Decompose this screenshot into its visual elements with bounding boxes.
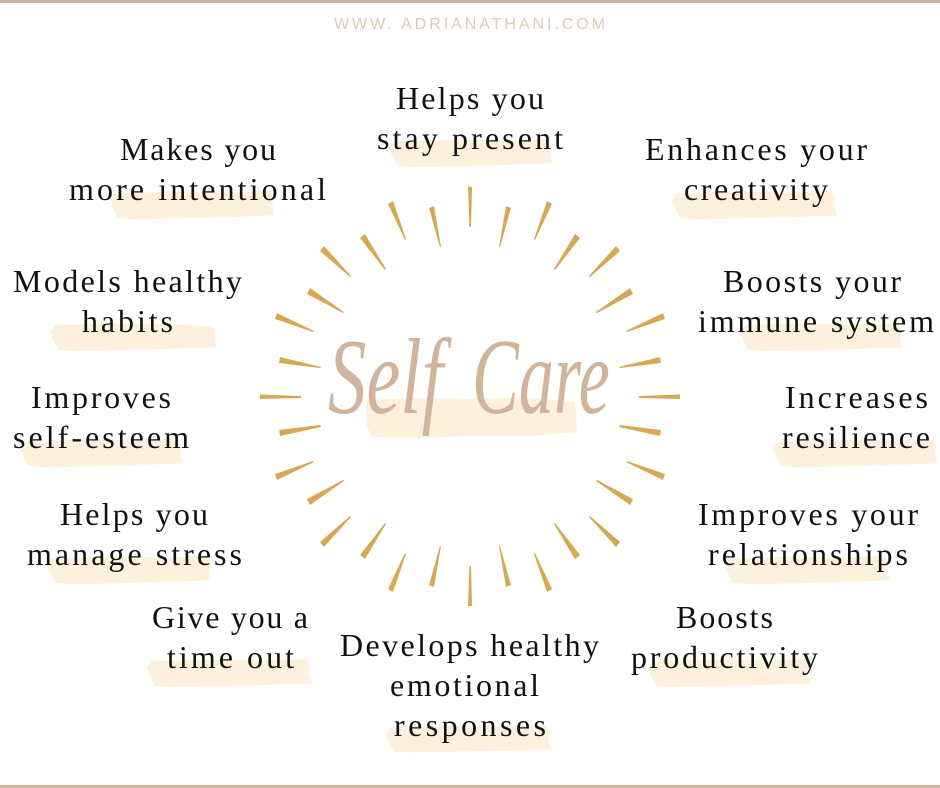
benefit: models healthy habits: Models healthy [13,263,242,299]
benefit: enhances your creativity: creativity [684,171,828,207]
benefit: models healthy habits: habits [82,303,173,339]
benefit: develops healthy emotional responses [340,627,599,752]
benefit: increases resilience: resilience [782,419,930,455]
website url: WWW. ADRIANATHANI.COM [334,16,605,33]
benefit: improves your relationships: Improves your [698,496,918,532]
benefit: improves self-esteem [13,379,189,467]
benefit: makes you more intentional: more intentional [69,171,326,207]
center title: self care: Care [472,317,610,437]
benefit: boosts productivity [631,599,818,687]
center title: self care [328,317,610,438]
benefit: enhances your creativity: Enhances your [645,131,867,167]
benefit: develops healthy emotional responses: Develops healthy [340,627,599,663]
benefit: helps you stay present: stay present [377,120,563,156]
benefit: boosts productivity: productivity [631,639,818,675]
center title: self care: Self [328,318,452,437]
benefit: helps you stay present: Helps you [396,80,544,116]
benefit: improves your relationships: relationships [708,536,908,572]
benefit: boosts your immune system: Boosts your [723,263,901,299]
benefit: helps you stay present [377,80,563,167]
benefit: develops healthy emotional responses: emotional [390,667,539,703]
benefit: give you a time out: time out [167,639,294,675]
benefit: give you a time out: Give you a [152,599,308,635]
benefit: enhances your creativity [645,131,867,219]
benefit: helps you manage stress: manage stress [27,536,242,572]
benefit: makes you more intentional [69,131,326,219]
benefit: boosts productivity: Boosts [676,599,773,635]
benefit: makes you more intentional: Makes you [120,131,276,167]
benefit: give you a time out [147,599,312,687]
benefit: increases resilience: Increases [785,379,928,415]
benefit: develops healthy emotional responses: responses [394,707,546,743]
benefit: models healthy habits [13,263,242,351]
benefit: improves self-esteem: Improves [31,379,171,415]
benefit: helps you manage stress: Helps you [60,496,208,532]
top border [0,0,940,3]
benefit: increases resilience [773,379,937,467]
benefit: improves self-esteem: self-esteem [13,419,189,455]
benefit: boosts your immune system [698,263,934,351]
benefit: boosts your immune system: immune system [698,303,934,339]
benefit: helps you manage stress [27,496,242,584]
benefit: improves your relationships [698,496,918,584]
bottom border [0,785,940,788]
sunburst rays [260,187,680,606]
